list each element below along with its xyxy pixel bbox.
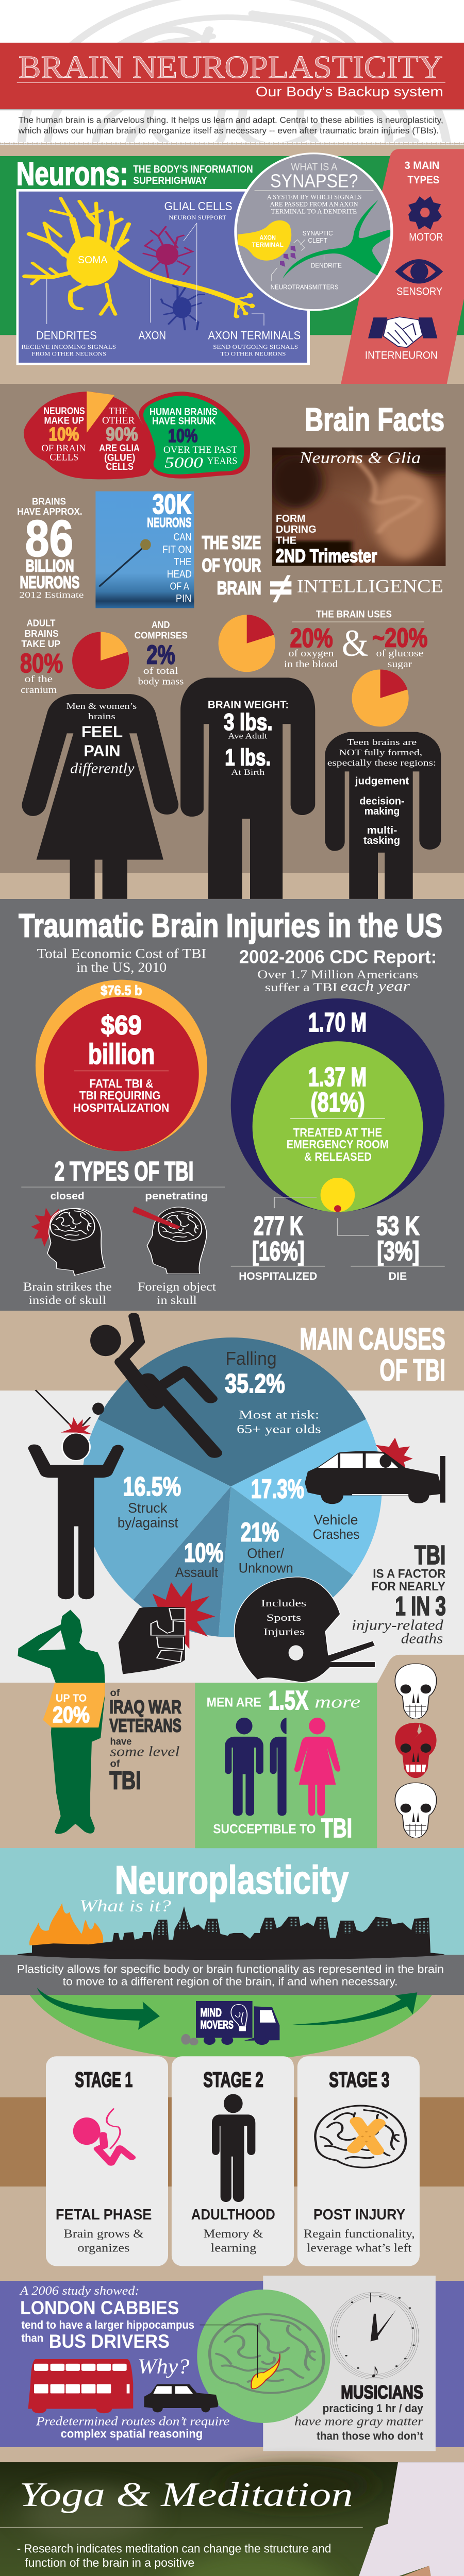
green dome [29,1995,432,2061]
neuron labels: DENDRITES [36,329,97,342]
icon: man [225,1718,263,1816]
stat: 86 billion neurons [17,496,84,600]
stat: die [338,1211,445,1282]
stat: 86 billion neurons: BILLION [26,557,74,575]
icon: saluting soldier: UP TO [56,1692,87,1704]
intro text [18,115,443,135]
heading: 2 types of tbi: 2 TYPES OF TBI [55,1157,193,1187]
panel: main causes of tbi: 10% [184,1538,223,1568]
neuron diagram [16,189,310,365]
synapse labels: DENDRITE [311,261,342,269]
neuron labels [21,200,301,358]
tbi type: penetrating: in skull [157,1294,197,1307]
stat: cranium and body mass: 80% [20,649,63,678]
stage card 2: ADULTHOOD [191,2206,275,2223]
chart: economic cost nested ovals [36,980,207,1151]
stat: cranium and body mass: body mass [138,676,184,687]
stage card 2 [172,2056,294,2266]
slice label: vehicle crashes: 17.3% [251,1474,304,1504]
london cabbies study: LONDON CABBIES [20,2297,179,2318]
slice label: assault [175,1538,223,1580]
slice label: vehicle crashes: Crashes [313,1527,359,1542]
figure: man brain weight: 1 lbs. [225,745,271,770]
figure: man brain weight: 3 lbs. [224,709,273,735]
heading: neurons: THE BODY’S INFORMATION [133,163,253,175]
brain shaped stat: neurons and glia: 10% [49,424,79,444]
stage card 2: STAGE 2 [203,2068,263,2092]
stat: oxygen and glucose: of glucose [376,648,423,659]
london cabbies study: than [21,2332,43,2345]
stat: oxygen and glucose: 20% [290,623,333,653]
chart: tbi outcome nested ovals: & RELEASED [304,1150,372,1163]
stage card 1: STAGE 1 [75,2068,132,2092]
photo card: 30k neurons on a pin: 30K [153,488,191,519]
synapse labels: SYNAPTIC [303,229,333,237]
stat: tbi factor 1 in 3 [352,1540,446,1646]
stat: 86 billion neurons: BRAINS [32,496,66,507]
axon terminal [238,221,291,261]
photo card: 30k neurons on a pin: OF A [170,580,189,592]
figure: teen brain: making [364,805,400,817]
icon: fist [119,1582,215,1674]
statement: size of brain not equal intelligence: THE SIZE [202,532,261,553]
stat: cranium and body mass: TAKE UP [21,639,60,650]
yoga text [0,2476,364,2576]
icon: person struck [28,1390,124,1599]
figure: teen brain: multi- [367,824,397,836]
icon: woman [294,1718,340,1816]
photo card: 30k neurons on a pin: HEAD [167,568,192,580]
panel: men more susceptible: more [314,1692,360,1711]
glial cell blue [161,286,204,330]
brain shaped stat: shrinkage: 10% [168,426,197,446]
economic cost heading: in the US, 2010 [76,959,167,975]
chart: economic cost nested ovals: HOSPITALIZATION [73,1101,169,1114]
figure: teen brain: especially these regions: [327,758,436,768]
synapse labels: NEUROTRANSMITTERS [271,283,339,291]
icon: handshake [368,317,437,347]
figure: man brain weight: Ave Adult [228,731,267,741]
icon: red skull [395,1722,437,1778]
glial cell purple [143,227,192,280]
stat: iraq war veterans: TBI [109,1766,141,1794]
figure: teen brain: tasking [363,835,400,846]
brain shaped stat: shrinkage: OVER THE PAST [163,445,237,455]
neuron labels: AXON [139,329,166,342]
panel: three main neuron types: TYPES [407,174,439,185]
figure: woman feels pain: PAIN [84,741,121,760]
yoga text: function of the brain in a positive [25,2556,194,2570]
panel: brain facts [17,391,464,899]
neuron labels: GLIAL CELLS [164,200,233,213]
icon: gear [408,196,442,230]
figure: woman feels pain: brains [88,711,115,721]
stat: cranium and body mass: of the [25,674,53,684]
stat: cranium and body mass: 2% [146,640,175,670]
icon: taxi [144,2384,219,2412]
stat: iraq war veterans: some level [110,1743,179,1759]
stat: 86 billion neurons: 2012 Estimate [19,590,84,600]
brain shaped stat: shrinkage: YEARS [207,455,237,466]
chart: tbi outcome nested ovals: TREATED AT THE [293,1126,382,1139]
stat: cranium and body mass [20,618,188,696]
stat: tbi factor 1 in 3: deaths [401,1630,443,1646]
brain shaped stat: neurons and glia: ARE GLIA [99,443,140,454]
panel: men more susceptible [195,1683,377,1848]
panel: three main neuron types [341,149,464,384]
figure: man brain weight: BRAIN WEIGHT: [208,699,289,710]
panel: what is a synapse: ARE PASSED FROM AN AXON [270,200,358,208]
icon: white skull lower [395,1783,437,1838]
icon: white skull [395,1664,437,1719]
icon: car crash [305,1438,445,1504]
heading: neuroplasticity [79,1858,349,1916]
pie: man head [219,615,275,672]
economic cost heading: Total Economic Cost of TBI [37,946,206,961]
statement: size of brain not equal intelligence [202,532,443,602]
brain shaped stat: neurons and glia: CELLS [106,461,134,472]
neuron labels: AXON TERMINALS [208,329,301,342]
brain shaped stat: neurons and glia: CELLS [49,452,78,463]
neuron labels: SOMA [78,254,107,266]
panel: what is a synapse: WHAT IS A [291,161,337,173]
figure: woman feels pain [22,694,178,899]
icon: fire [29,1903,103,1945]
neuron cell yellow [25,198,255,318]
heading: neurons: Neurons: [16,155,128,192]
stat: oxygen and glucose: sugar [388,659,412,670]
chart: economic cost nested ovals: $69 [101,1010,142,1040]
stage card 2: Memory & [203,2227,263,2240]
stage card 1 [46,2056,168,2266]
icon: football helmet: Includes [261,1598,306,1609]
figure: woman feels pain: Men & women’s [67,701,137,711]
slice label: vehicle crashes [251,1474,359,1542]
pie chart: causes [81,1337,382,1637]
stage card 3 [297,2056,420,2266]
stat: 86 billion neurons: 86 [25,510,73,567]
chart: economic cost nested ovals: FATAL TBI & [89,1077,153,1090]
chart: economic cost nested ovals: $76.5 b [101,984,142,998]
stat: hospitalized [231,1197,325,1282]
slice label: vehicle crashes: Vehicle [313,1513,358,1528]
panel: main causes of tbi [18,1316,464,1848]
stat: hospitalized: [16%] [252,1236,305,1266]
brain shaped stat: neurons and glia [24,391,153,479]
icon: mind movers truck: MOVERS [201,2019,234,2031]
brain shaped stat: shrinkage: 5000 [164,454,203,471]
icon: falling person [90,1316,214,1453]
stat: oxygen and glucose [284,609,427,670]
slice label: assault: Assault [175,1565,218,1580]
panel: main causes of tbi: IRAQ WAR [109,1697,181,1717]
icon: saluting soldier: 20% [53,1702,90,1727]
dendrite [283,200,390,279]
slice label: struck by/against [118,1472,181,1531]
tbi type: penetrating: penetrating [145,1190,208,1202]
panel: brain facts: NEURONS [147,515,191,530]
london cabbies study: Predetermined routes don’t require [36,2414,229,2428]
chart: economic cost nested ovals: TBI REQUIRING [79,1089,161,1102]
stage card 1: organizes [77,2241,129,2255]
figure: woman feels pain: FEEL [81,722,123,741]
icon: city skyline [17,1906,445,1961]
icon: saluting soldier [18,1610,105,1834]
slice label: falling: 35.2% [225,1369,285,1398]
stat: die: 53 K [376,1211,420,1241]
stat: iraq war veterans: of [110,1687,120,1699]
chart: tbi outcome nested ovals: EMERGENCY ROOM [287,1138,389,1151]
stat: cranium and body mass: AND [152,620,170,631]
statement: size of brain not equal intelligence: OF YOUR [202,555,261,575]
arrow: truck to right [292,1992,417,2025]
figure: teen brain: judgement [355,775,409,787]
synapse labels: CLEFT [308,236,327,244]
neuron labels: FROM OTHER NEURONS [31,351,106,358]
panel: what is a synapse: TERMINAL TO A DENDRITE [271,208,357,215]
tbi type: penetrating [132,1190,217,1307]
panel: traumatic brain injuries in the us [19,907,445,1307]
stage card 1: FETAL PHASE [56,2206,152,2223]
stat: cranium and body mass: of total [143,666,178,676]
icon: music clock [330,2292,419,2382]
arrow: left to truck [37,1988,160,2030]
chart: tbi outcome nested ovals: 1.70 M [308,1008,367,1037]
panel: neurons [0,149,464,384]
slice label: other: 21% [241,1517,279,1547]
cdc report heading [239,946,437,994]
london cabbies study [19,2283,229,2441]
panel: what is a synapse: SYNAPSE? [270,171,358,191]
photo: fetus neurons and glia: DURING [276,523,317,535]
figure: woman feels pain: differently [70,760,135,776]
synapse labels: TERMINAL [252,241,284,248]
stat: oxygen and glucose: & [342,622,369,664]
figure: teen brain: Teen brains are [347,737,417,747]
panel: what is a synapse [236,154,392,310]
slice label: struck by/against: Struck [128,1501,168,1516]
photo card: 30k neurons on a pin: CAN [173,531,191,543]
neuron labels: SEND OUTGOING SIGNALS [213,344,298,350]
tbi type: closed: closed [51,1190,85,1202]
photo: fetus neurons and glia: Neurons & Glia [299,449,421,467]
stat: iraq war veterans: of [110,1758,120,1769]
title banner [0,43,464,110]
slice label: falling: Most at risk: [239,1409,319,1421]
photo: fetus neurons and glia: THE [276,534,296,546]
brain shaped stat: neurons and glia: OTHER [102,415,135,426]
panel: main causes of tbi: 16.5% [123,1472,181,1501]
tbi type: penetrating: Foreign object [138,1280,217,1293]
brain shaped stat: neurons and glia: MAKE UP [44,415,84,426]
stat: hospitalized: 277 K [254,1211,303,1241]
icon: head closed injury [47,1208,105,1275]
panel: brain facts: NEURONS [20,573,79,592]
panel: yoga and meditation [0,2462,464,2576]
tbi type: closed: inside of skull [29,1294,106,1307]
panel: main causes of tbi: VETERANS [109,1715,181,1736]
panel: three main neuron types: 3 MAIN [405,159,439,172]
icon: head penetrating injury [132,1206,207,1274]
header [0,43,464,135]
photo: fetus neurons and glia [272,447,445,566]
synapse labels [252,229,342,291]
icon: brain with bandage [315,2106,406,2167]
photo card: 30k neurons on a pin: THE [174,556,191,568]
economic cost heading [37,946,206,975]
stat: iraq war veterans [109,1687,181,1794]
panel: skulls [377,1655,464,1838]
icon: mind movers truck: MIND [201,2007,222,2019]
icon: music clock: ♪ [371,2360,379,2382]
chart: tbi outcome nested ovals: (81%) [311,1088,365,1117]
slice label: falling [225,1348,321,1436]
photo: person shirt [355,2462,464,2576]
slice label: other: Unknown [239,1561,293,1576]
london cabbies study: complex spatial reasoning [61,2428,203,2441]
panel: men more susceptible: TBI [321,1814,352,1843]
figure: teen brain: NOT fully formed, [339,748,422,757]
icon: bus [28,2359,133,2413]
stage card 3: leverage what’s left [307,2241,412,2255]
icon: football helmet [235,1577,375,1682]
photo card: 30k neurons on a pin [95,488,194,608]
tbi type: closed [23,1190,112,1307]
synapse labels: AXON [259,233,276,241]
chart: tbi outcome nested ovals: 1.37 M [308,1062,367,1092]
icon: adult person [212,2094,255,2202]
brain shaped stat: shrinkage [139,392,250,479]
figure: teen brain [325,732,441,899]
panel: neuroplasticity [0,1858,464,2266]
stat: oxygen and glucose: of oxygen [289,648,334,659]
stat: die: [3%] [377,1236,419,1266]
brain with hippocampus [197,2290,330,2423]
london cabbies study: Why? [138,2354,189,2378]
stat: oxygen and glucose: in the blood [284,659,338,670]
stat: hospitalized: HOSPITALIZED [239,1270,317,1282]
brain shaped stat: neurons and glia: NEURONS [43,405,85,417]
icon: football helmet: Injuries [263,1627,305,1637]
photo: fetus neurons and glia: FORM [276,512,305,524]
icon: fetus [73,2109,131,2163]
chart: tbi outcome nested ovals [231,998,444,1212]
stat: cranium and body mass: ADULT [27,618,56,629]
green band [0,156,464,335]
neuron labels: RECIEVE INCOMING SIGNALS [21,344,116,350]
chart: economic cost nested ovals: billion [88,1038,155,1070]
slice label: falling: 65+ year olds [237,1423,321,1436]
stage card 1: Brain grows & [63,2227,143,2240]
cdc report heading: suffer a TBI [265,980,337,994]
icon: eye [395,259,443,283]
london cabbies study: BUS DRIVERS [49,2331,170,2352]
icon: mind movers truck [181,2001,279,2045]
stat: iraq war veterans: have [110,1736,131,1747]
stage card 3: STAGE 3 [329,2068,389,2092]
slice label: other [239,1517,293,1576]
stat: die: DIE [389,1270,407,1282]
icon: half man [270,1718,287,1816]
panel: men more susceptible: 1.5X [269,1686,308,1715]
icon: impact burst [31,1208,59,1247]
cdc report heading: each year [340,978,410,994]
photo: person arm and hand [262,2566,435,2576]
brain shaped stat: neurons and glia: 90% [106,424,138,444]
slice label: struck by/against: by/against [118,1516,178,1531]
stat: cranium and body mass: cranium [21,685,57,696]
panel: musicians [263,2276,436,2451]
panel: men more susceptible: SUCCEPTIBLE TO [213,1821,316,1836]
stat: 86 billion neurons: HAVE APPROX. [17,506,82,517]
brain shaped stat: neurons and glia: OF BRAIN [41,443,86,454]
brain shaped stat: neurons and glia: (GLUE) [104,452,135,463]
photo: meditation background [0,2462,464,2576]
stat: cranium and body mass: COMPRISES [135,630,188,641]
figure: man brain weight: At Birth [231,767,264,777]
slice label: other: Other/ [247,1546,284,1561]
panel: men more susceptible: MEN ARE [207,1694,261,1709]
icon: football helmet: Sports [267,1613,301,1623]
london cabbies study: tend to have a larger hippocampus [21,2319,194,2331]
panel: what is a synapse: A SYSTEM BY WHICH SIGNALS [267,193,361,201]
photo card: 30k neurons on a pin: PIN [176,592,191,604]
stat: cranium and body mass: BRAINS [25,629,59,639]
neuron labels: TO OTHER NEURONS [221,351,286,358]
statement: size of brain not equal intelligence: BRAIN [217,578,261,598]
stage card 3: Regain functionality, [304,2227,415,2240]
london cabbies study: A 2006 study showed: [19,2283,139,2297]
stage card 3: POST INJURY [313,2206,405,2223]
gray band with definition [0,1955,464,1995]
stage card 2: learning [211,2241,257,2255]
stat: oxygen and glucose: THE BRAIN USES [316,609,392,620]
slice label: falling: Falling [225,1348,277,1369]
tbi type: closed: Brain strikes the [23,1280,112,1293]
neuron labels: NEURON SUPPORT [169,214,227,221]
figure: teen brain: decision- [359,795,405,807]
heading: main causes [300,1322,445,1387]
yoga text: Yoga & Meditation [19,2476,353,2513]
figure: man brain weight [180,677,315,899]
pie: woman head [72,632,129,689]
panel: studies [19,2276,436,2451]
neurotransmitter arrows [280,246,296,267]
heading: neurons: SUPERHIGHWAY [133,175,207,187]
heading: neuroplasticity: What is it? [79,1896,171,1916]
photo card: 30k neurons on a pin: FIT ON [162,544,191,555]
brain shaped stat: shrinkage: HUMAN BRAINS [150,406,218,417]
brain shaped stat: neurons and glia: THE [109,406,128,417]
brain shaped stat: shrinkage: HAVE SHRUNK [152,416,216,427]
pie: teen head [352,669,409,726]
